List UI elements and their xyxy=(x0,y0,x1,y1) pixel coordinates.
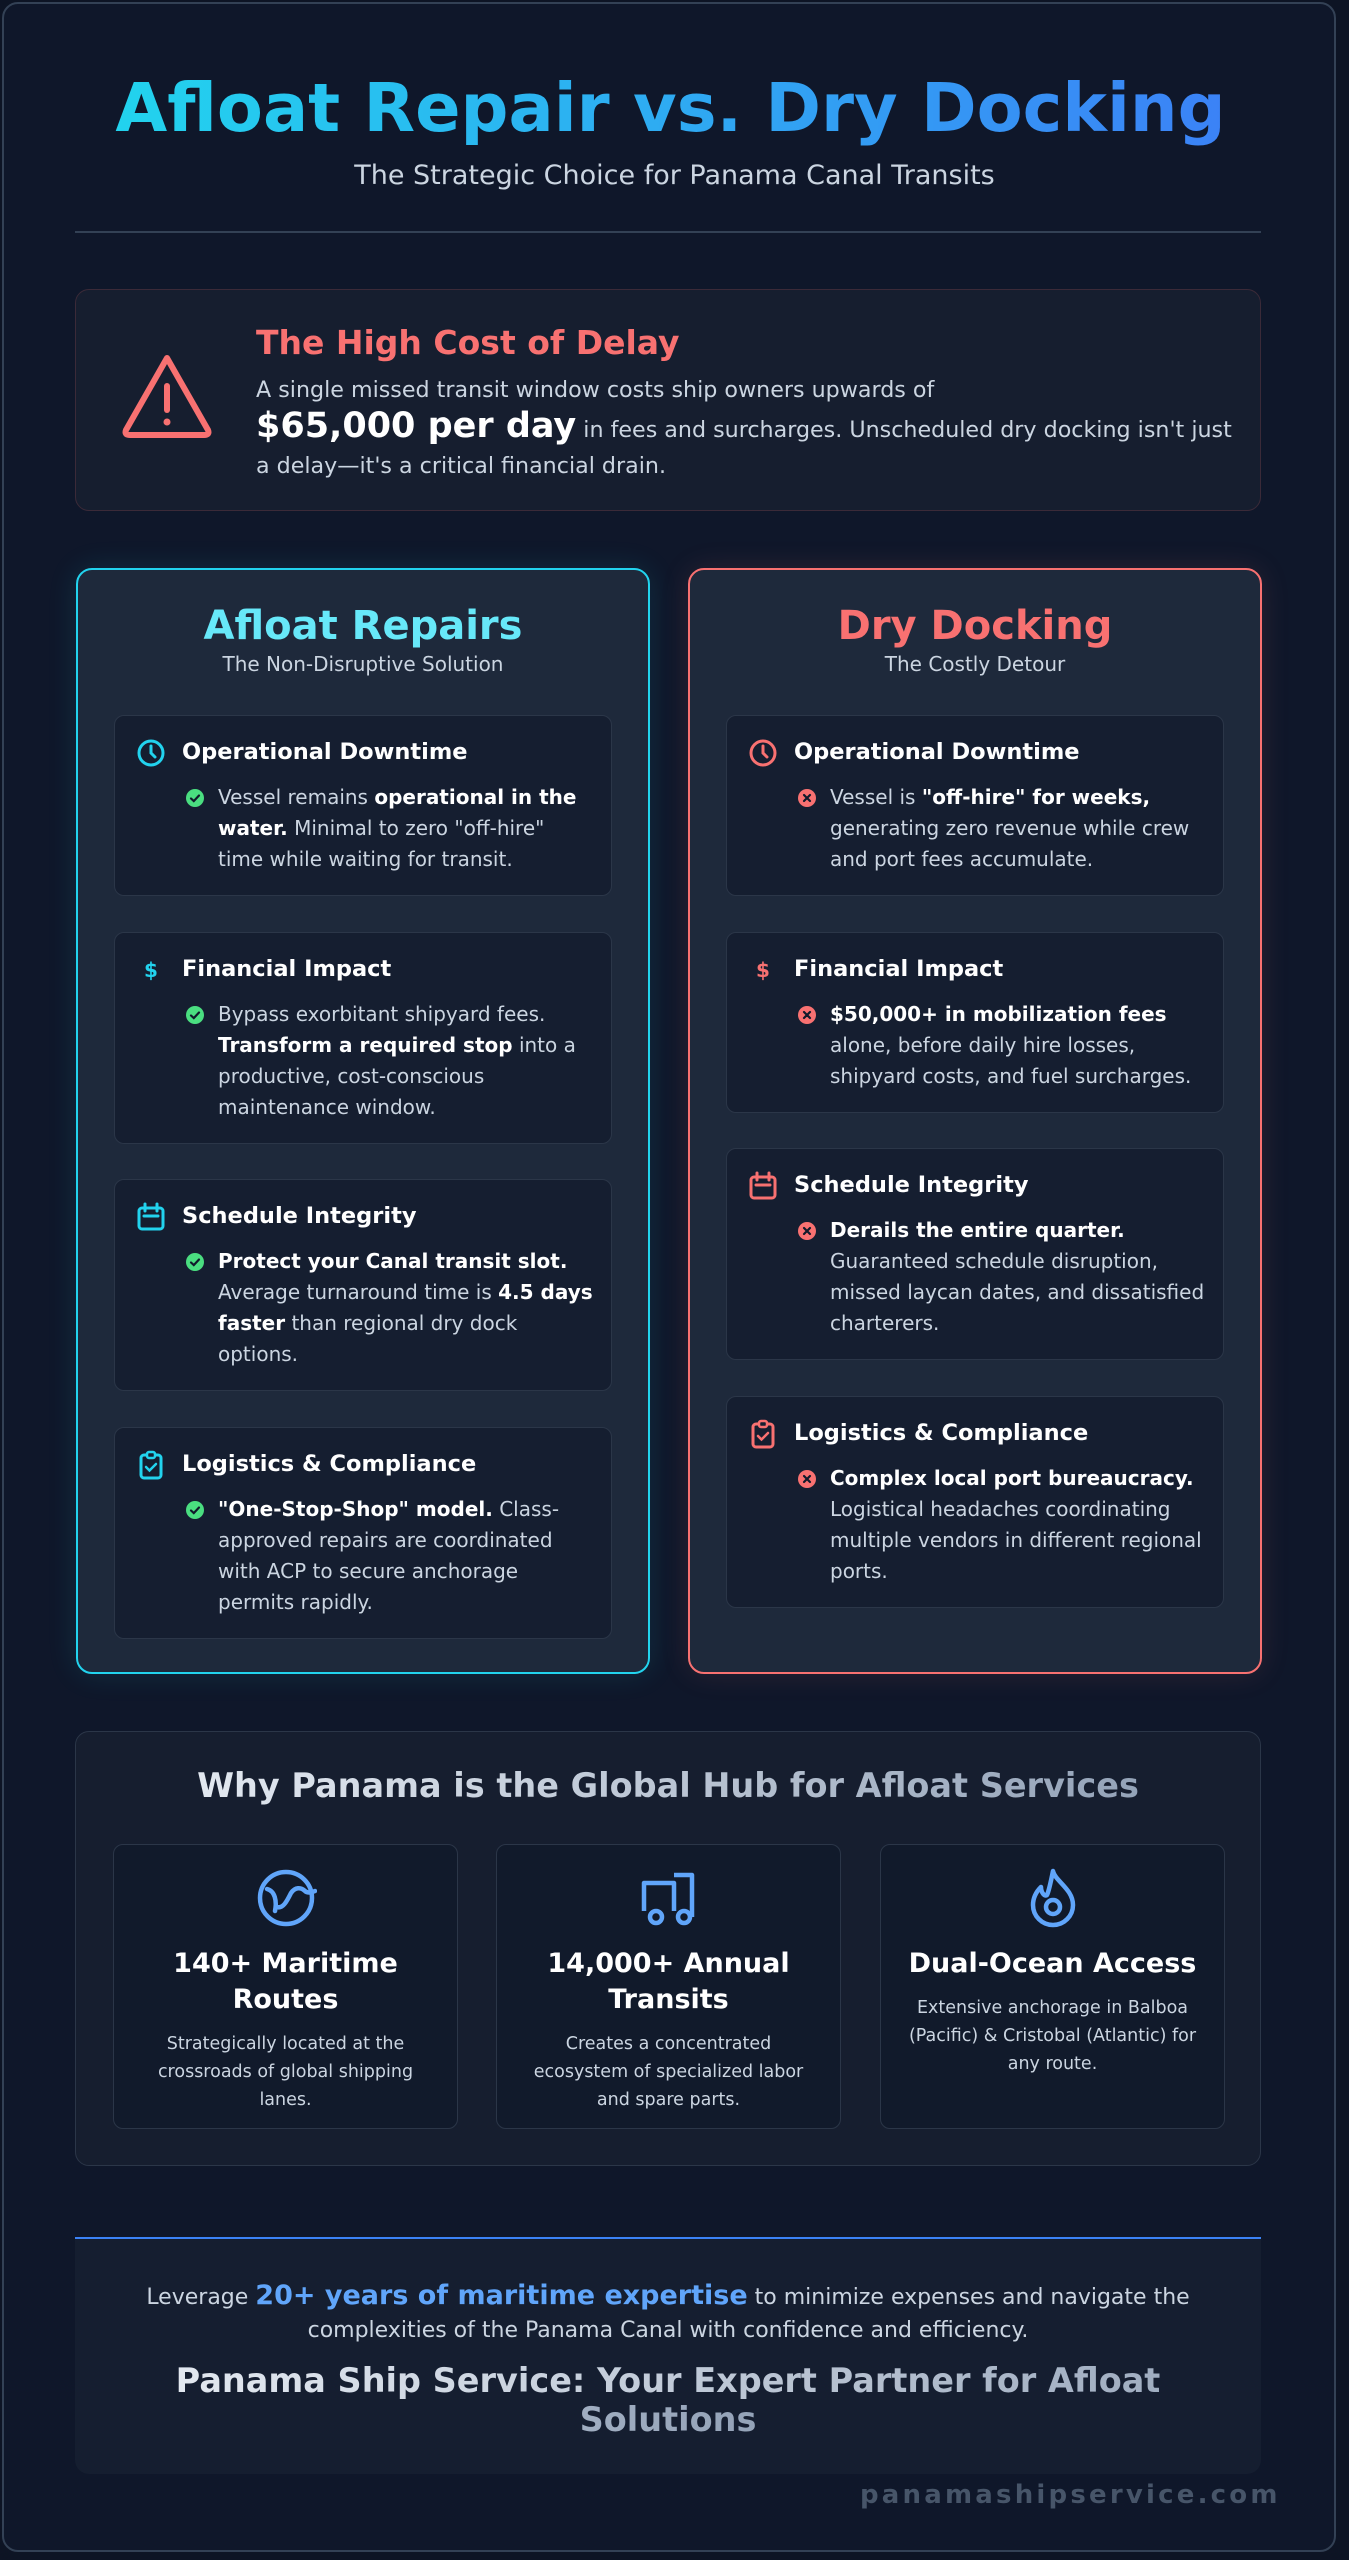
subheading: The Non-Disruptive Solution xyxy=(222,652,504,676)
card: operational downtime: time while waiting for transit. xyxy=(218,847,513,871)
card: annual transits: Creates a concentrated ecosystem of specialized labor and spare parts. xyxy=(534,2034,803,2110)
card: schedule integrity: Schedule Integrity xyxy=(182,1203,416,1229)
card: logistics: Logistics & Compliance xyxy=(794,1420,1088,1446)
card: financial impact: $ xyxy=(756,958,770,982)
panel: dry docking xyxy=(688,568,1262,1674)
footer callout xyxy=(75,2237,1261,2474)
card: maritime routes: Strategically located at the crossroads of global shipping lanes. xyxy=(158,2034,413,2110)
card: operational downtime: Operational Downtime xyxy=(182,739,468,765)
card: schedule integrity xyxy=(726,1148,1224,1360)
heading: The High Cost of Delay xyxy=(256,323,680,362)
card: operational downtime: Operational Downtime xyxy=(794,739,1080,765)
card: financial impact: Bypass exorbitant shipyard fees. Transform a required stop into a productive, cost-conscious maintenance window. xyxy=(218,1002,576,1119)
heading: Afloat Repairs xyxy=(204,603,522,649)
text block: A single missed transit window costs ship owners upwards of in fees and surcharges. Unscheduled dry docking isn't just a delay—it's a critical financial drain. xyxy=(256,377,1232,479)
card: schedule integrity xyxy=(114,1179,612,1391)
heading: Why Panama is the Global Hub for Afloat Services xyxy=(197,1766,1139,1805)
closing heading: Panama Ship Service: Your Expert Partner for Afloat Solutions xyxy=(176,2361,1160,2439)
card: operational downtime: Vessel remains operational in the water. Minimal to zero "off-hire" xyxy=(218,785,576,840)
card: logistics: Complex local port bureaucracy. Logistical headaches coordinating multiple vendors in different regional ports. xyxy=(830,1466,1202,1583)
card: annual transits xyxy=(496,1844,841,2129)
card: financial impact: $ xyxy=(144,958,158,982)
card: maritime routes: 140+ Maritime Routes xyxy=(173,1948,398,2015)
card: operational downtime xyxy=(114,715,612,896)
card: financial impact: $50,000+ in mobilization fees alone, before daily hire losses, shipyard costs, and fuel surcharges. xyxy=(830,1002,1191,1088)
text block: $65,000 per day xyxy=(256,406,576,446)
title: Afloat Repair vs. Dry Docking xyxy=(115,69,1226,147)
panel: why panama xyxy=(75,1731,1261,2166)
card: maritime routes xyxy=(113,1844,458,2129)
card: dual-ocean access xyxy=(880,1844,1225,2129)
heading: Dry Docking xyxy=(838,603,1112,649)
icon: warning triangle xyxy=(122,355,212,438)
card: financial impact: Financial Impact xyxy=(794,956,1003,982)
card: logistics xyxy=(726,1396,1224,1608)
card: dual-ocean access: Extensive anchorage in Balboa (Pacific) & Cristobal (Atlantic) for any route. xyxy=(909,1998,1196,2074)
card: annual transits: 14,000+ Annual Transits xyxy=(547,1948,790,2015)
card: operational downtime: Vessel is "off-hire" for weeks, generating zero revenue while crew and port fees accumulate. xyxy=(830,785,1189,871)
card: financial impact xyxy=(726,932,1224,1113)
card: operational downtime xyxy=(726,715,1224,896)
card: dual-ocean access: Dual-Ocean Access xyxy=(909,1948,1196,1979)
card: schedule integrity: Schedule Integrity xyxy=(794,1172,1028,1198)
text block: Leverage 20+ years of maritime expertise to minimize expenses and navigate the complexities of the Panama Canal with confidence and efficiency. xyxy=(146,2280,1190,2343)
card: financial impact xyxy=(114,932,612,1144)
subheading: The Costly Detour xyxy=(885,652,1065,676)
card: logistics: "One-Stop-Shop" model. Class-approved repairs are coordinated with ACP to secure anchorage permits rapidly. xyxy=(218,1497,559,1614)
watermark: panamashipservice.com xyxy=(860,2480,1281,2510)
card: financial impact: Financial Impact xyxy=(182,956,391,982)
card: logistics: Logistics & Compliance xyxy=(182,1451,476,1477)
panel: afloat repairs xyxy=(76,568,650,1674)
panel: high cost of delay xyxy=(75,289,1261,511)
card: schedule integrity: Derails the entire quarter. Guaranteed schedule disruption, missed laycan dates, and dissatisfied charterers. xyxy=(830,1218,1204,1335)
card: logistics xyxy=(114,1427,612,1639)
card: schedule integrity: Protect your Canal transit slot. Average turnaround time is 4.5 days faster than regional dry dock options. xyxy=(218,1249,593,1366)
subtitle: The Strategic Choice for Panama Canal Transits xyxy=(354,160,995,191)
